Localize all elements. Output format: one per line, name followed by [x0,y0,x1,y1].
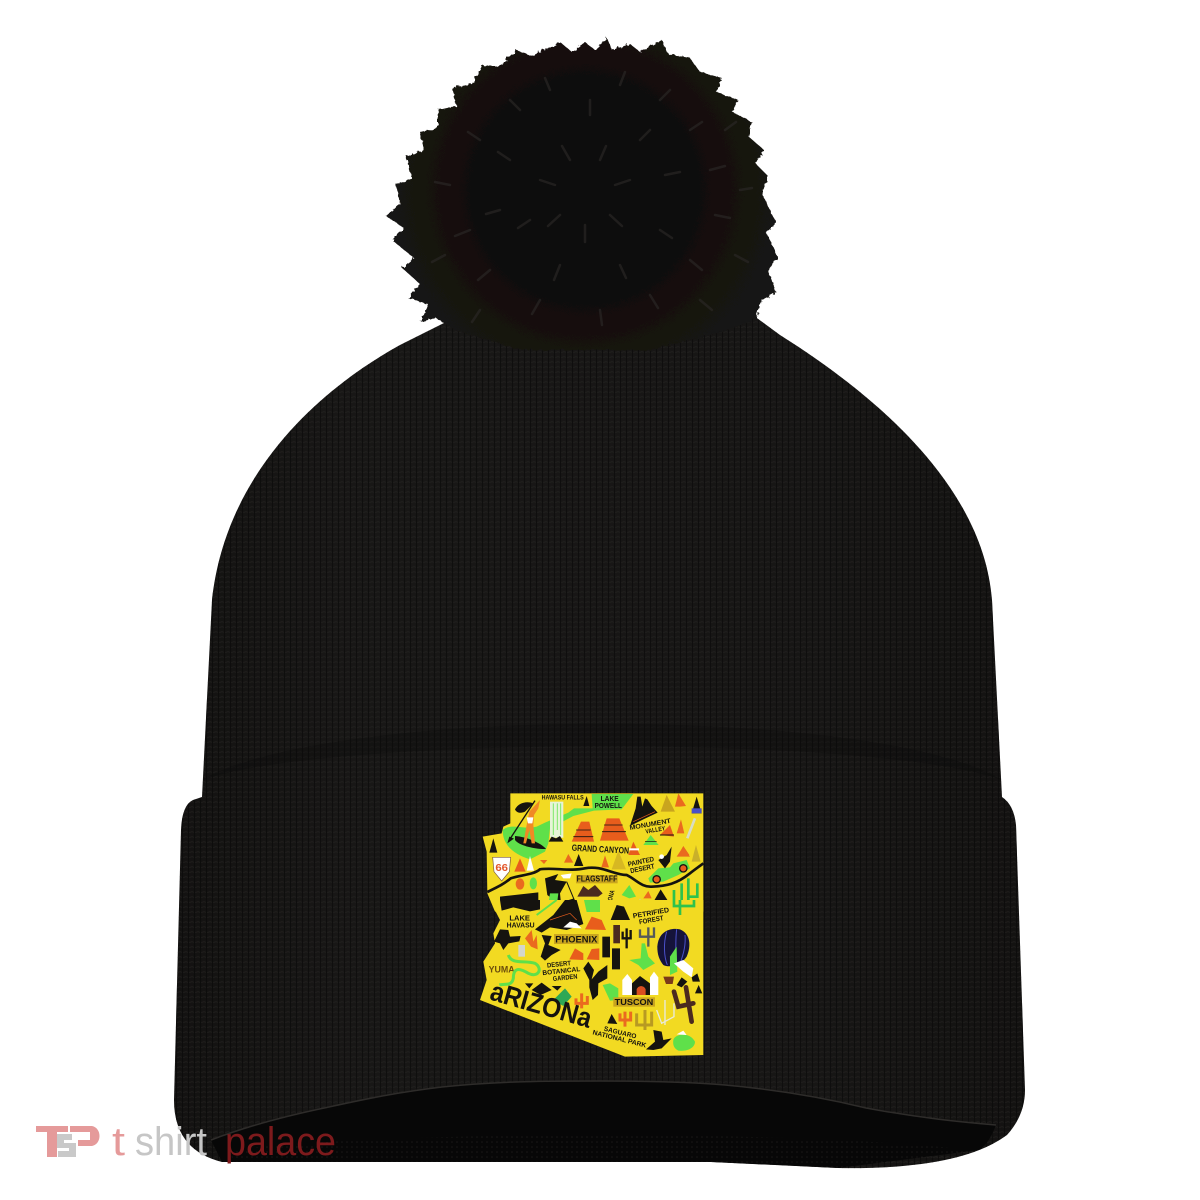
label: Lake Havasu: HAVASU [507,922,535,929]
label: Tucson: TUSCON [615,997,653,1007]
agave plants [525,983,562,995]
paddleboarder [507,800,546,849]
Monument Valley butte [630,797,658,826]
label: Lake Powell [595,796,622,810]
route 66 shield: 66 [495,863,509,874]
Arizona title: aRIZONa [487,975,596,1034]
label: Petrified Forest [632,907,671,927]
label: Havasu Falls: HAWASU FALLS [542,795,584,802]
classic car with driver [648,847,690,883]
painted hills [628,835,659,855]
green cactus ball [553,988,572,1006]
watermark: t shirt palace [36,1120,336,1164]
Lake Havasu bridge [500,892,538,912]
cacti near Petrified Forest [613,900,694,970]
label: Flagstaff: FLAGSTAFF [577,874,617,884]
Sedona rock [611,905,630,920]
black dove shape [494,929,521,950]
small rocks east [692,973,702,993]
label: Lake Powell: POWELL [595,801,622,810]
label: Saguaro National Park: NATIONAL PARK [592,1029,647,1050]
trees and plants west [489,796,690,872]
hat body with crown and cuff [174,310,1025,1168]
orange rock formations [569,948,599,960]
label: Painted Desert: DESERT [630,863,656,875]
label: Lake Havasu [507,916,535,929]
label: Lake Havasu: LAKE [509,916,530,923]
Tucson mission church [622,972,658,995]
route 66 shield [493,857,511,881]
green lake and river [503,794,633,859]
park cactus and bush [646,1030,695,1051]
label: Phoenix: PHOENIX [555,934,597,944]
yellow state shape [483,793,703,912]
black prickly pear cactus [583,962,607,1000]
label: Monument Valley: VALLEY [645,825,667,836]
lower saguaros [607,1000,674,1030]
label: Grand Canyon: GRAND CANYON [572,843,629,856]
waterfall [549,802,563,842]
label: Lake Powell: LAKE [601,796,619,803]
large brown saguaro [674,987,693,1022]
watermark text palace: palace [225,1120,336,1164]
lower state shape [480,900,703,1057]
label: Saguaro National Park: SAGUARO [603,1026,637,1041]
white bird [674,960,693,977]
label: Monument Valley: MONUMENT [629,818,671,832]
label: Desert Botanical Garden: BOTANICAL [542,966,581,977]
hiker [542,873,577,912]
watermark text shirt: shirt [135,1120,207,1164]
hat inner lining [211,1081,996,1168]
label: Desert Botanical Garden [541,959,581,984]
Arizona map patch, lower part [480,900,703,1057]
pom-pom [386,38,778,350]
label: Petrified Forest: FOREST [639,915,665,926]
Hiker's mountain [500,900,606,933]
pom-pom yarn strands [432,72,752,325]
orange coral and white cactus [518,930,538,957]
Grand Canyon rocks [572,818,629,842]
label: Petrified Forest: PETRIFIED [632,907,670,920]
route 66 road [487,863,703,892]
watermark logo TSP [36,1126,100,1157]
Flagstaff mountains [577,885,603,897]
striped buildings [602,937,620,969]
green aloe [603,983,618,1001]
northeast desert motifs [660,793,702,862]
large dark barrel cactus [657,929,689,984]
Arizona map patch, upper part [483,793,703,912]
label: Sedona fragment: SEDONA [604,889,617,911]
label: Monument Valley [629,818,672,838]
dark prickly cactus [541,935,561,961]
label: Desert Botanical Garden: GARDEN [553,973,578,983]
label: Painted Desert: PAINTED [627,856,655,869]
central plants and rocks [622,878,697,912]
label: Desert Botanical Garden: DESERT [547,960,571,970]
small west plants [516,877,537,890]
beanie hat [160,38,1040,1180]
knit texture, fold and lining [160,300,1040,1180]
green snake [499,955,539,985]
label: Painted Desert [627,856,656,875]
orange cactus [576,993,587,1008]
watermark text t: t [112,1120,125,1164]
label: Yuma: YUMA [489,964,515,974]
